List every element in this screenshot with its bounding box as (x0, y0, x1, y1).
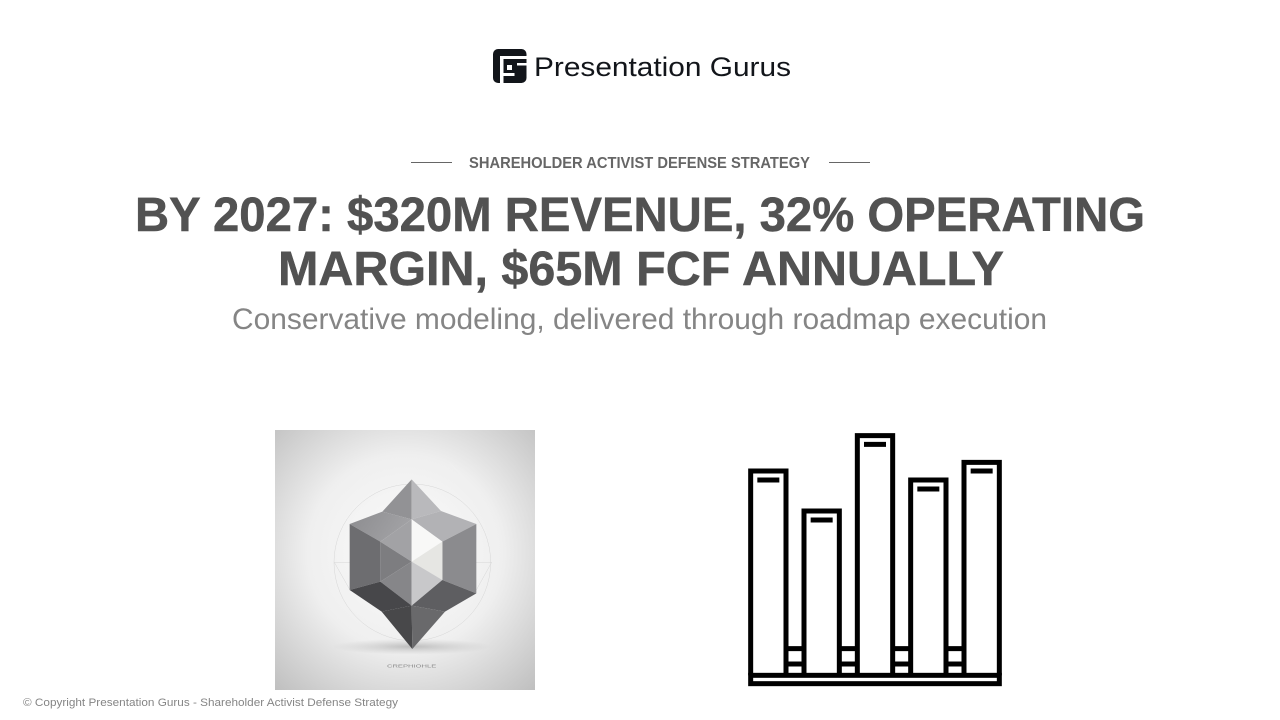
icon: logo mark (493, 49, 527, 83)
logo wordmark: Presentation Gurus (534, 52, 791, 82)
bar 5 (964, 462, 999, 675)
bar 3 (857, 436, 893, 675)
logo: Presentation Gurus (493, 49, 791, 83)
title (135, 189, 1145, 296)
image: geometric gem (275, 430, 535, 690)
bar 1 (751, 471, 786, 675)
subtitle: Conservative modeling, delivered through roadmap execution (232, 303, 1047, 336)
title: BY 2027: $320M REVENUE, 32% OPERATING (135, 189, 1145, 242)
bar 4 (911, 480, 946, 675)
gem facets (350, 479, 476, 649)
thin construction lines (334, 462, 492, 641)
ground shadow (332, 639, 492, 655)
title: MARGIN, $65M FCF ANNUALLY (278, 243, 1004, 296)
chart base (751, 675, 999, 684)
bar connectors (786, 649, 964, 664)
icon: bar chart (751, 436, 999, 684)
footer copyright: © Copyright Presentation Gurus - Shareholder Activist Defense Strategy (23, 697, 399, 709)
eyebrow heading: SHAREHOLDER ACTIVIST DEFENSE STRATEGY (469, 155, 811, 172)
bar caps (757, 444, 993, 520)
bar 2 (804, 511, 839, 675)
small caption in image: CREPHIOHLE (387, 664, 437, 670)
